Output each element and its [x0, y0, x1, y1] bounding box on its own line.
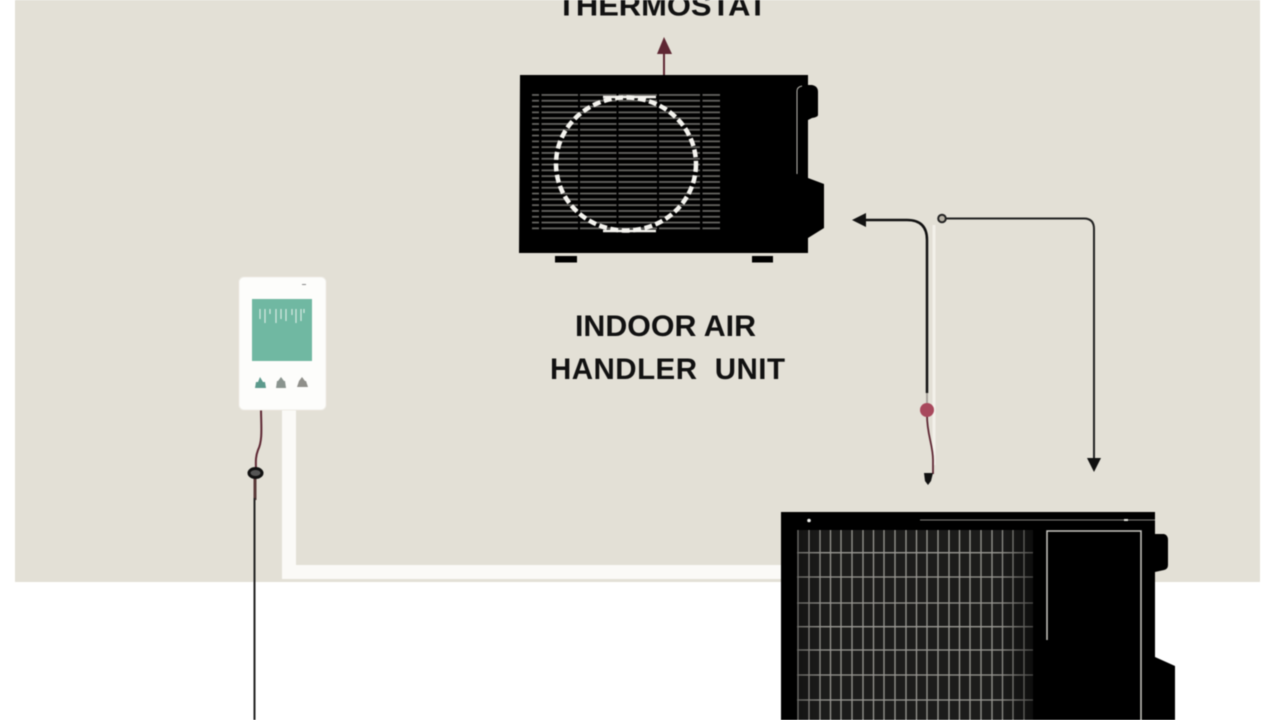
service door — [1047, 531, 1141, 720]
thermostat wiring pipe — [289, 408, 782, 572]
screen readout — [260, 309, 304, 323]
button icon middle — [276, 377, 286, 388]
valve dot — [920, 403, 934, 417]
indoor air handler unit — [519, 75, 824, 262]
button icon left — [255, 377, 266, 388]
panel: wall background — [15, 0, 1260, 582]
top status line — [807, 519, 1155, 522]
label: indoor air handler unit — [550, 310, 785, 386]
outdoor condenser unit — [781, 512, 1175, 720]
unit body — [519, 75, 824, 253]
side highlight — [797, 86, 802, 174]
condenser coil grid — [797, 530, 1033, 720]
right foot — [752, 256, 773, 262]
label: indoor air handler unit: HANDLER UNIT — [550, 353, 785, 386]
fan ring — [556, 97, 696, 231]
arrow: refrigerant return to indoor unit — [852, 213, 934, 485]
screen — [252, 299, 312, 361]
arrow: line to outdoor unit — [938, 215, 1101, 472]
arrow: up to thermostat label — [657, 37, 672, 76]
left foot — [555, 256, 577, 262]
sensor mark — [302, 284, 306, 285]
button icon right — [297, 377, 308, 387]
label: indoor air handler unit: INDOOR AIR — [575, 310, 756, 343]
louver grille — [532, 93, 720, 233]
unit body — [781, 512, 1175, 720]
highlight beside vertical line — [932, 225, 936, 465]
thermostat wire — [249, 408, 262, 720]
wire clip — [249, 468, 262, 478]
thermostat device — [239, 277, 326, 410]
